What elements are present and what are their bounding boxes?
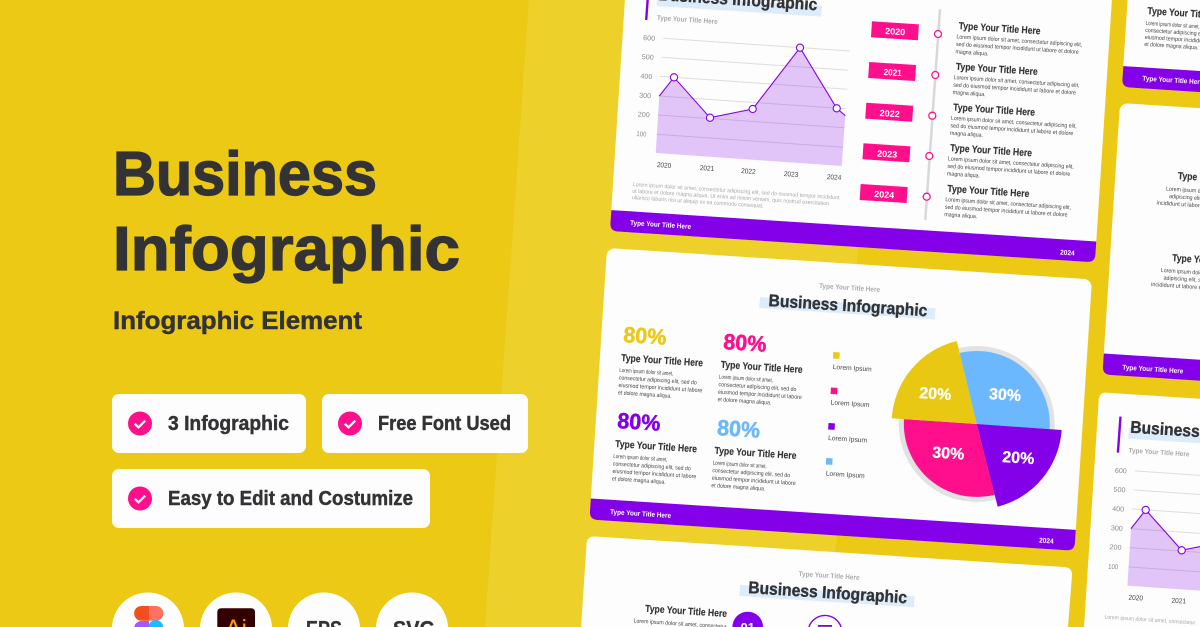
pie chart: 20% <box>1002 449 1035 468</box>
text block upper <box>1156 171 1200 213</box>
timeline entry 2020 <box>955 21 1084 64</box>
area chart: 2020 <box>657 162 672 170</box>
timeline entry 2024 <box>944 184 1072 226</box>
slide heading: Type Your Title Here <box>819 283 880 294</box>
slide heading: Business Infographic <box>748 578 908 607</box>
stat: pink 80%: Lorem ipsum dolor sit amet, <box>719 375 773 384</box>
pie chart <box>892 341 1062 507</box>
stat: blue 80%: Type Your Title Here <box>714 446 797 462</box>
stat: yellow 80%: eiusmod tempor incididunt ut labore <box>618 383 702 394</box>
timeline year tags: 2020 <box>885 26 905 37</box>
timeline axis <box>925 9 940 220</box>
slide card <box>1102 103 1200 406</box>
stat: purple 80%: consectetur adipiscing elit, sed do <box>613 461 691 472</box>
icon: Figma <box>112 592 184 627</box>
pie chart: 30% <box>988 386 1022 405</box>
chart caption: ullamco laboris nisi ut aliquip ex ea commodo consequat. <box>632 195 764 210</box>
timeline entry 2021: magna aliqua. <box>952 90 986 98</box>
pie legend: Lorem Ipsum <box>826 471 865 480</box>
slide card <box>581 536 1072 627</box>
icon: SVG <box>376 592 448 627</box>
slide heading <box>1117 417 1200 459</box>
stat: blue 80%: 80% <box>716 415 761 443</box>
timeline entry 2023 <box>947 143 1075 186</box>
background light band <box>485 0 876 627</box>
timeline entry 2023: Lorem ipsum dolor sit amet, consectetur adipiscing elit, <box>948 156 1074 171</box>
panel: statistics and pie chart slide <box>589 248 1092 551</box>
area chart <box>1108 468 1200 606</box>
timeline entry 2020: sed do eiusmod tempor incididunt ut labore et dolore <box>956 42 1079 56</box>
feature chip: Easy to Edit and Costumize <box>112 469 430 528</box>
slide footer <box>1102 353 1200 406</box>
chart caption: Lorem ipsum dolor sit amet, consectetur adipiscing elit, sed do eiusmod tempor incididunt <box>633 182 840 201</box>
stat: purple 80% <box>612 408 698 488</box>
slide heading: Type Your Title Here <box>798 571 860 582</box>
timeline year tags: 2023 <box>877 149 897 160</box>
slide heading <box>645 0 822 26</box>
stat: yellow 80% <box>618 322 704 402</box>
slide footer: Type Your Title Here <box>1122 365 1184 375</box>
stat: yellow 80%: Lorem ipsum dolor sit amet, <box>619 368 674 377</box>
slide heading and chart <box>1104 417 1200 626</box>
stat: purple 80%: eiusmod tempor incididunt ut labore <box>612 469 696 480</box>
slide heading: Business Infographic <box>768 291 928 320</box>
slide heading: Type Your Title Here <box>657 15 718 26</box>
timeline entry 2021: Lorem ipsum dolor sit amet, consectetur adipiscing elit, <box>953 75 1080 89</box>
feature chip: 3 Infographic: 3 Infographic <box>168 413 289 435</box>
slide card <box>1084 393 1200 627</box>
stat: purple 80%: 80% <box>617 408 661 436</box>
timeline year tags <box>860 21 919 203</box>
feature chip: Free Font Used <box>322 394 528 453</box>
area chart: 300 <box>1111 525 1123 533</box>
stat: pink 80%: consectetur adipiscing elit, sed do <box>718 382 797 393</box>
subtitle: Infographic Element <box>113 307 363 335</box>
area chart <box>636 35 850 182</box>
area chart: 100 <box>636 131 647 139</box>
pie legend: Lorem Ipsum <box>828 435 868 445</box>
timeline entry 2021: sed do eiusmod tempor incididunt ut labore et dolore <box>953 83 1076 97</box>
stat: pink 80%: et dolore magna aliqua. <box>717 397 772 407</box>
stat: yellow 80%: et dolore magna aliqua. <box>618 390 672 400</box>
icon: EPS <box>288 592 360 627</box>
area chart: 400 <box>1112 506 1124 514</box>
feature chip: Free Font Used: Free Font Used <box>378 413 511 435</box>
pie legend <box>826 352 872 480</box>
timeline entry 2024: Lorem ipsum dolor sit amet, consectetur adipiscing elit, <box>945 197 1072 211</box>
text block lower <box>1151 253 1200 295</box>
timeline entry 2023: sed do eiusmod tempor incididunt ut labore et dolore <box>947 164 1070 178</box>
timeline entry 2024: sed do eiusmod tempor incididunt ut labore et dolore <box>945 205 1068 219</box>
pie legend: Lorem Ipsum <box>833 364 872 374</box>
stat: purple 80%: Type Your Title Here <box>615 439 698 455</box>
slide footer <box>1122 66 1200 118</box>
title: Business <box>113 140 377 209</box>
area chart: 300 <box>639 93 651 100</box>
area chart: 600 <box>1115 468 1127 475</box>
pie chart: 20% <box>919 385 952 404</box>
timeline entry 2022: Type Your Title Here <box>953 102 1036 119</box>
timeline entry 2020: Type Your Title Here <box>958 21 1041 37</box>
stat: purple 80%: et dolore magna aliqua. <box>612 476 666 486</box>
area chart: 200 <box>1109 544 1122 552</box>
icon: Adobe Illustrator <box>200 592 272 627</box>
timeline entry 2020: Lorem ipsum dolor sit amet, consectetur adipiscing elit, <box>956 34 1083 49</box>
area chart: 2023 <box>784 171 799 179</box>
slide footer <box>589 498 1076 551</box>
chart caption <box>632 182 840 215</box>
timeline entry 2024: magna aliqua. <box>944 212 978 220</box>
stat: blue 80%: consectetur adipiscing elit, sed do <box>712 468 790 479</box>
timeline entry 2022: Lorem ipsum dolor sit amet, consectetur adipiscing elit, <box>951 116 1077 130</box>
timeline entry 2024: Type Your Title Here <box>947 184 1030 200</box>
slide card <box>589 248 1092 551</box>
timeline year tags: 2024 <box>874 189 894 200</box>
process step text: Type Your Title Here <box>645 604 728 620</box>
stat: blue 80%: et dolore magna aliqua. <box>711 483 766 493</box>
stat: yellow 80%: Type Your Title Here <box>621 353 704 369</box>
panel: line chart and timeline slide <box>610 0 1112 262</box>
stat: pink 80% <box>717 329 804 408</box>
timeline entry 2020: magna aliqua. <box>955 49 989 58</box>
area chart: 400 <box>640 73 653 81</box>
timeline entry 2023: Type Your Title Here <box>950 143 1033 159</box>
timeline entry 2022 <box>950 102 1078 145</box>
process step text <box>633 604 728 627</box>
title <box>113 140 460 284</box>
panel: bottom right line chart slide <box>1084 393 1200 627</box>
timeline dots <box>923 30 942 200</box>
slide heading: Type Your Title Here <box>1128 448 1190 459</box>
area chart: 2024 <box>827 174 842 182</box>
feature chip: 3 Infographic <box>112 394 306 453</box>
feature chip: Easy to Edit and Costumize: Easy to Edit and Costumize <box>168 488 413 510</box>
slide footer <box>610 210 1096 262</box>
panel: top right slide <box>1122 0 1200 118</box>
stat: blue 80%: eiusmod tempor incididunt ut labore <box>712 476 796 487</box>
title: Infographic <box>113 215 460 284</box>
step number badge 01 <box>732 612 763 627</box>
pie chart: 30% <box>932 444 965 464</box>
slide card <box>610 0 1112 262</box>
slide footer: Type Your Title Here <box>610 509 671 520</box>
timeline entry 2022: magna aliqua. <box>950 131 983 139</box>
area chart: 500 <box>642 54 654 62</box>
slide footer: 2024 <box>1039 538 1054 545</box>
area chart: 500 <box>1113 487 1126 494</box>
area chart: 100 <box>1108 564 1118 571</box>
timeline entry 2021 <box>952 62 1081 104</box>
area chart: 2021 <box>1171 598 1186 606</box>
slide footer: Type Your Title Here <box>630 220 691 231</box>
step icon circle <box>809 615 841 627</box>
stat: blue 80% <box>711 415 798 494</box>
area chart: 2021 <box>700 165 715 173</box>
stat: pink 80%: eiusmod tempor incididunt ut labore <box>718 390 802 401</box>
timeline entry 2023: magna aliqua. <box>947 171 980 180</box>
stat: purple 80%: Lorem ipsum dolor sit amet, <box>613 454 668 463</box>
timeline entry 2022: sed do eiusmod tempor incididunt ut labore et dolore <box>950 123 1073 137</box>
area chart: 2022 <box>741 168 756 176</box>
timeline entry 2021: Type Your Title Here <box>956 62 1038 78</box>
stat: yellow 80%: consectetur adipiscing elit, sed do <box>619 375 697 386</box>
stat: yellow 80%: 80% <box>623 322 667 350</box>
panel: bottom process slide <box>581 536 1072 627</box>
text block <box>1144 6 1200 53</box>
area chart: 200 <box>638 112 650 119</box>
timeline year tags: 2022 <box>879 108 900 119</box>
stat: pink 80%: Type Your Title Here <box>720 360 803 376</box>
panel: middle right slide <box>1102 103 1200 406</box>
stat: blue 80%: Lorem ipsum dolor sit amet, <box>713 461 767 470</box>
pie legend: Lorem Ipsum <box>830 400 870 409</box>
chart caption: ut labore et dolore magna aliqua. Ut enim ad minim veniam, quis nostrud exercitation <box>632 189 829 207</box>
slide card <box>1122 0 1200 118</box>
timeline year tags: 2021 <box>883 67 902 78</box>
area chart: 2020 <box>1128 595 1143 603</box>
stat: pink 80%: 80% <box>723 329 767 357</box>
slide footer: 2024 <box>1060 250 1075 257</box>
area chart: 600 <box>643 35 655 43</box>
